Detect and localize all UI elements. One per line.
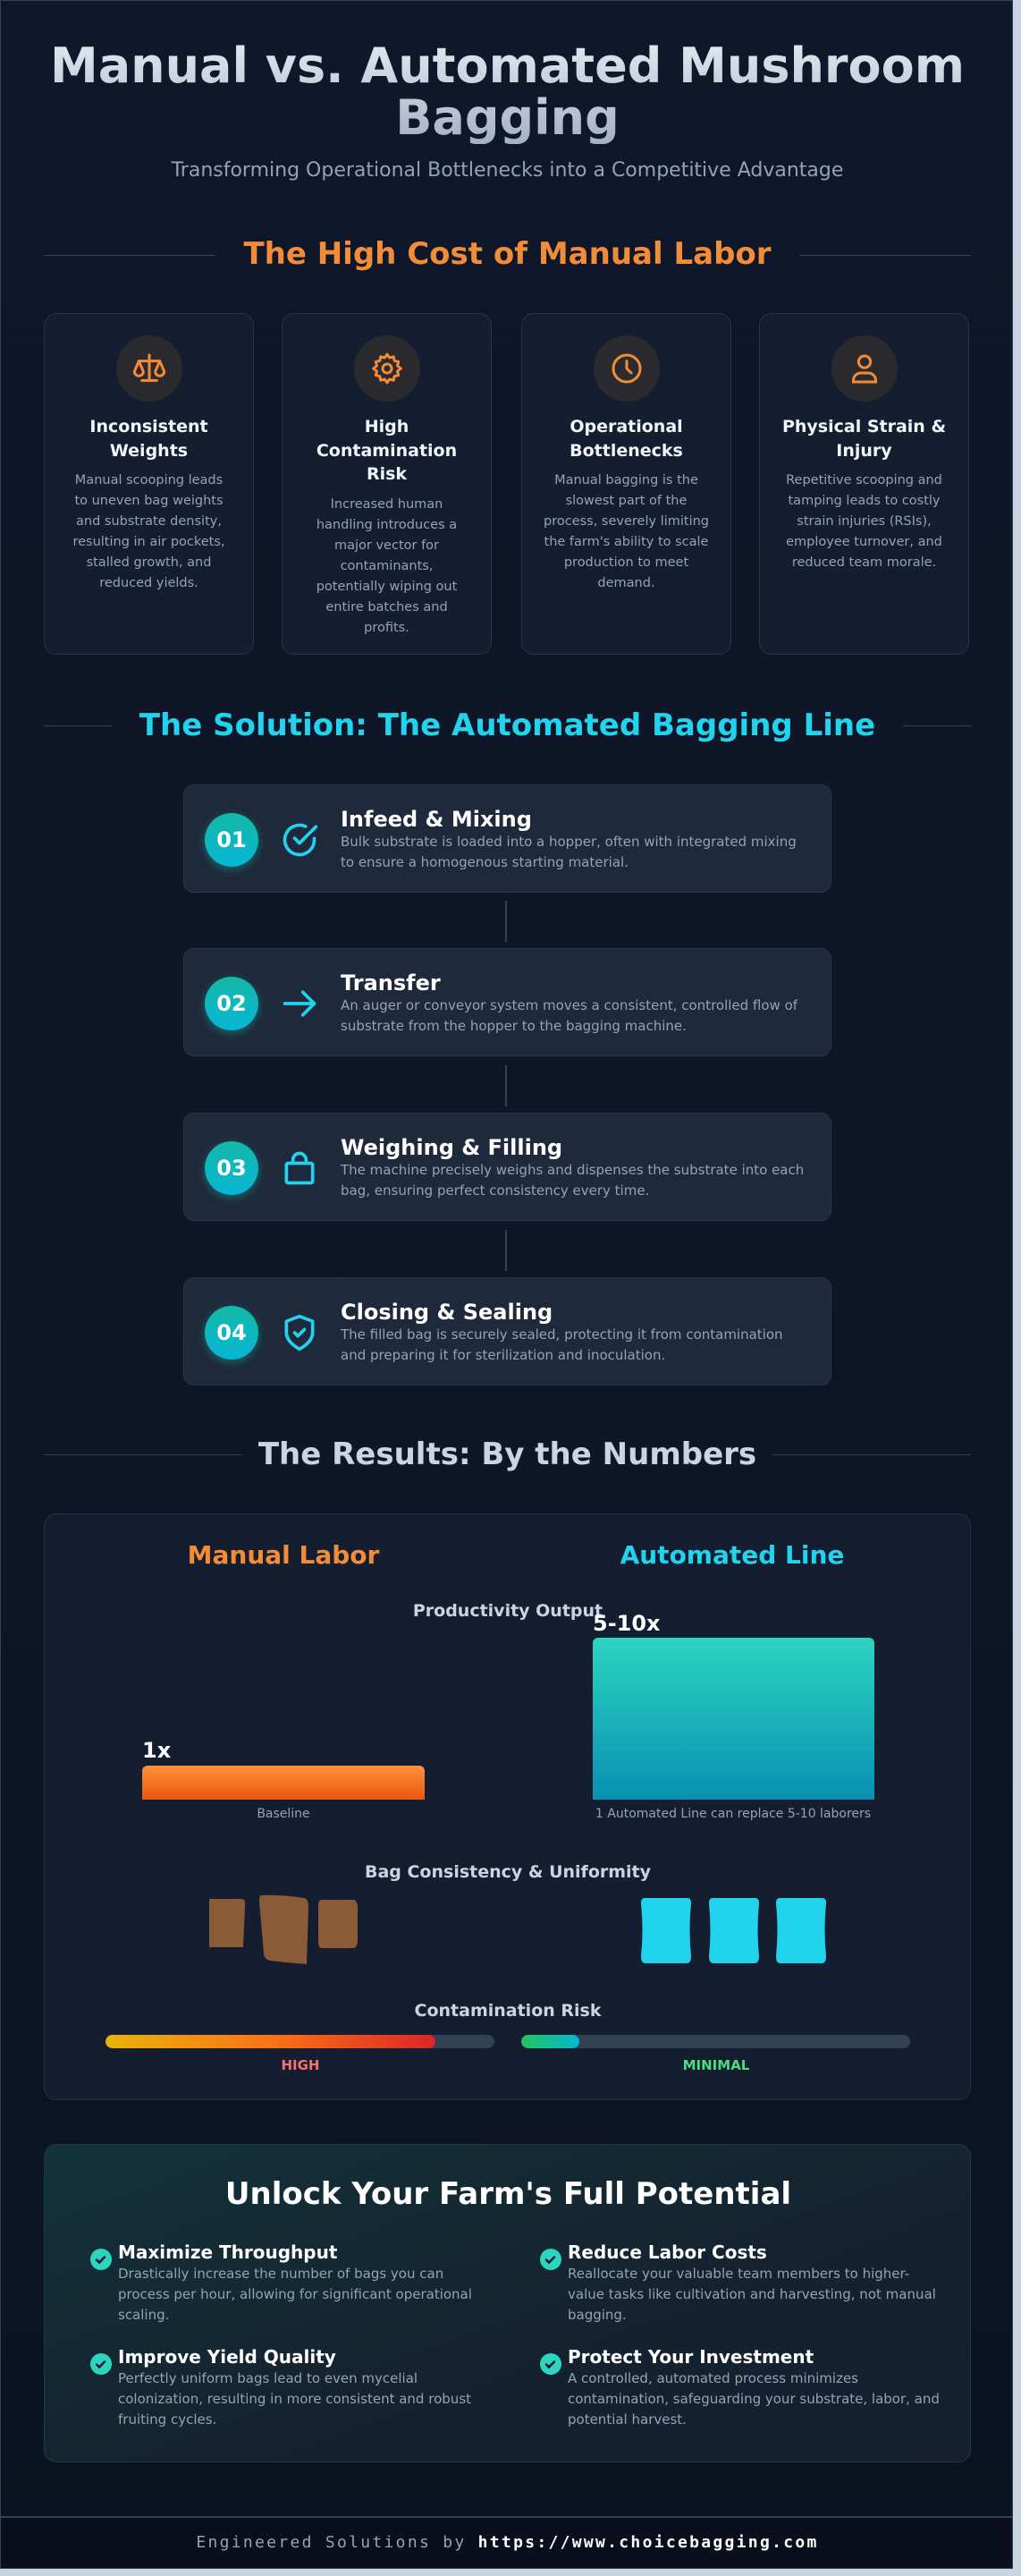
panel: inconsistent weights (44, 313, 254, 655)
footer: Engineered Solutions by https://www.choicebagging.com (196, 2533, 819, 2552)
benefit: labor costs: Reduce Labor Costs (568, 2241, 767, 2263)
chart: productivity: 5-10x (593, 1611, 661, 1636)
step 4 (183, 1277, 831, 1385)
text: weights (72, 417, 225, 590)
text: bottlenecks: Bottlenecks (570, 440, 683, 460)
panel: bottlenecks (521, 313, 731, 655)
icon: clock (594, 335, 660, 402)
step 3 (183, 1113, 831, 1221)
chart: contamination risk: MINIMAL (683, 2057, 749, 2073)
text: bottlenecks: Manual bagging is the slowest part of the process, severely limiting the farm's ability to scale production to meet demand. (544, 473, 709, 590)
step 3: The machine precisely weighs and dispenses the substrate into each bag, ensuring perfect consistency every time. (341, 1162, 804, 1199)
title (1, 40, 1014, 144)
text: weights: Inconsistent (89, 417, 208, 436)
benefit: investment (540, 2346, 940, 2428)
subtitle: Transforming Operational Bottlenecks into a Competitive Advantage (172, 159, 843, 182)
text: contamination: Contamination (316, 440, 457, 460)
footer (1, 2516, 1014, 2570)
text: contamination: Increased human handling introduces a major vector for contaminants, potentially wiping out entire batches and profits. (316, 497, 457, 635)
step 2: 02 (216, 991, 247, 1016)
step 4: Closing & Sealing (341, 1300, 553, 1325)
text: bottlenecks: Operational (570, 417, 683, 436)
label: automated: Automated Line (620, 1540, 844, 1570)
text: strain: Injury (836, 440, 892, 460)
step 4: The filled bag is securely sealed, protecting it from contamination and preparing it for sterilization and inoculation. (341, 1326, 783, 1363)
text: weights: Manual scooping leads to uneven bag weights and substrate density, resulting in air pockets, stalled growth, and reduced yields. (72, 473, 225, 590)
step 3: 03 (216, 1156, 247, 1181)
panel: contamination (282, 313, 492, 655)
benefit: yield (90, 2346, 471, 2428)
step 4: 04 (216, 1320, 247, 1345)
text: contamination: High (365, 417, 409, 436)
step 2: An auger or conveyor system moves a consistent, controlled flow of substrate from the hopper to the bagging machine. (341, 997, 797, 1034)
chart: contamination risk: Contamination Risk (415, 2001, 601, 2021)
chart: productivity: 1 Automated Line can replace 5-10 laborers (595, 1807, 871, 1821)
title: Bagging (395, 89, 620, 146)
chart: bag consistency: Bag Consistency & Uniformity (365, 1862, 651, 1882)
text: strain (782, 417, 946, 570)
icon: shield (284, 1315, 315, 1351)
chart: productivity (142, 1601, 874, 1821)
benefit: labor costs (540, 2241, 936, 2323)
label: manual: Manual Labor (188, 1540, 379, 1570)
benefit: investment: A controlled, automated process minimizes contamination, safeguarding your substrate, labor, and potential harvest. (568, 2370, 940, 2428)
heading: results: The Results: By the Numbers (258, 1436, 756, 1472)
icon: gear (354, 335, 420, 402)
panel: call to action (44, 2144, 971, 2462)
benefit: investment: Protect Your Investment (568, 2346, 814, 2368)
title: Manual vs. Automated Mushroom (50, 38, 965, 94)
text: strain: Repetitive scooping and tamping leads to costly strain injuries (RSIs), employee turnover, and reduced team morale. (786, 473, 942, 570)
text: contamination (316, 417, 457, 635)
step 1 (183, 784, 831, 893)
chart: productivity: Baseline (257, 1807, 310, 1821)
chart: productivity: 1x (142, 1738, 171, 1763)
text: weights: Weights (110, 440, 188, 460)
step 3: Weighing & Filling (341, 1135, 562, 1160)
panel: results (44, 1513, 971, 2100)
chart: contamination risk: HIGH (281, 2057, 320, 2073)
icon: person (831, 335, 898, 402)
cta title: Unlock Your Farm's Full Potential (225, 2176, 791, 2212)
icon: arrow (283, 990, 316, 1017)
text: contamination: Risk (367, 464, 407, 484)
benefit: yield: Improve Yield Quality (118, 2346, 336, 2368)
heading: high cost: The High Cost of Manual Labor (243, 236, 772, 272)
step 2 (183, 948, 831, 1056)
step 1: 01 (216, 827, 247, 852)
step 2: Transfer (341, 970, 441, 996)
chart: productivity: Productivity Output (413, 1601, 603, 1621)
heading: solution: The Solution: The Automated Bagging Line (139, 708, 875, 743)
text: bottlenecks (544, 417, 709, 590)
step 1: Bulk substrate is loaded into a hopper, often with integrated mixing to ensure a homogenous starting material. (341, 834, 797, 869)
icon: scale (116, 335, 182, 402)
icon: check circle (283, 823, 318, 857)
step 1: Infeed & Mixing (341, 807, 532, 832)
panel: strain (759, 313, 969, 655)
chart: bag consistency (209, 1862, 826, 1964)
benefit: throughput: Maximize Throughput (118, 2241, 337, 2263)
chart: contamination risk (105, 2001, 910, 2073)
benefit: yield: Perfectly uniform bags lead to even mycelial colonization, resulting in more consistent and robust fruiting cycles. (118, 2370, 471, 2428)
icon: bag (284, 1152, 315, 1184)
text: strain: Physical Strain & (782, 417, 946, 436)
benefit: labor costs: Reallocate your valuable team members to higher-value tasks like cultivation and harvesting, not manual bagging. (568, 2266, 936, 2323)
benefit: throughput (90, 2241, 472, 2323)
benefit: throughput: Drastically increase the number of bags you can process per hour, allowing for significant operational scaling. (118, 2266, 472, 2323)
